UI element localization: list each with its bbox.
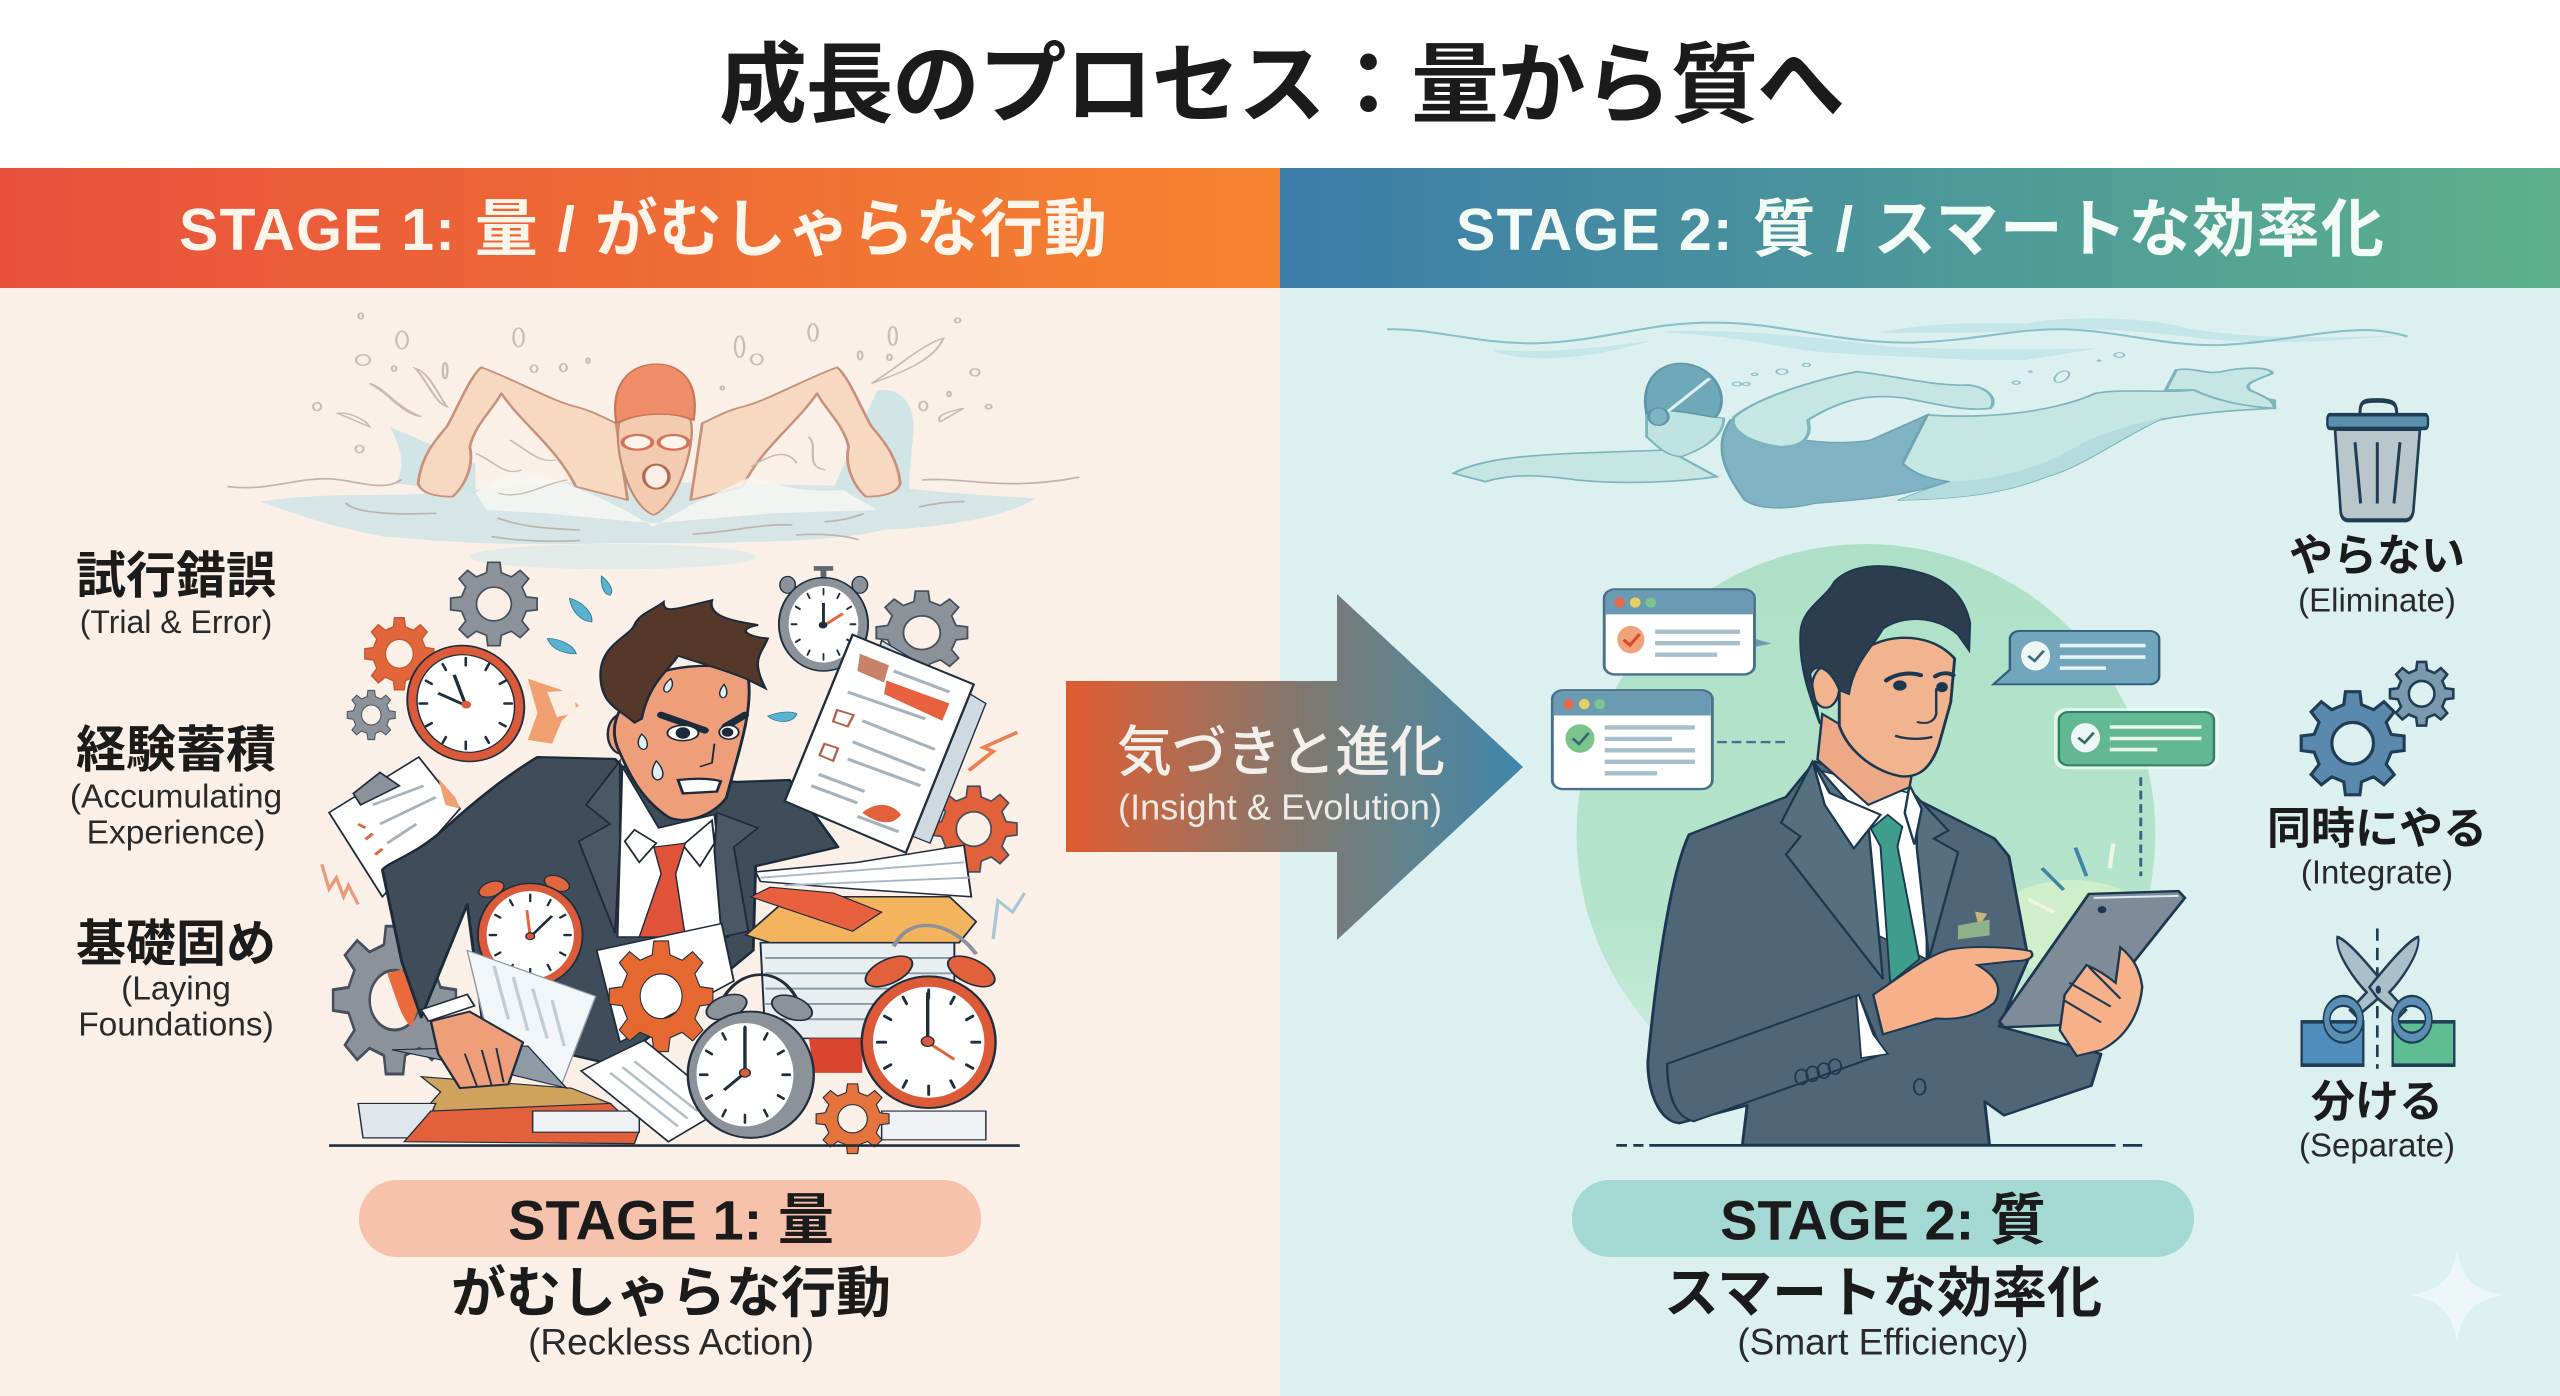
- caption: stage 1: (Reckless Action): [528, 1322, 814, 1362]
- illustration: overwhelmed businessman: [322, 562, 1025, 1154]
- background gears: [333, 562, 1017, 1074]
- window: orange check: [1604, 589, 1771, 674]
- red alarm clock: [859, 925, 1001, 1108]
- jacket: [1648, 761, 2101, 1145]
- caption: stage 1: [359, 1180, 981, 1362]
- caption: stage 2: STAGE 2: 質: [1720, 1188, 2046, 1252]
- hands: [1856, 947, 2142, 1058]
- arrow: insight and evolution: 気づきと進化: [1117, 721, 1445, 783]
- label: eliminate: やらない: [2289, 532, 2465, 580]
- icon: sparkle watermark: [2411, 1250, 2503, 1342]
- label: integrate: 同時にやる: [2267, 804, 2487, 854]
- arrow: insight and evolution: [1066, 594, 1523, 940]
- small orange gear: [816, 1084, 889, 1154]
- title: 成長のプロセス：量から質へ: [719, 36, 1845, 134]
- page background: [0, 0, 2560, 168]
- caption: stage 2: スマートな効率化: [1664, 1262, 2102, 1324]
- label: accumulating experience: Experience): [87, 814, 265, 852]
- paper stack: [746, 845, 976, 1073]
- arrow: insight and evolution: (Insight & Evolution): [1118, 786, 1442, 828]
- header: stage 2: STAGE 2: 質 / スマートな効率化: [1456, 195, 2384, 265]
- suit jacket: [382, 757, 838, 1065]
- label: laying foundations: [76, 916, 276, 1044]
- label: integrate: [2267, 804, 2487, 890]
- window: green check: [1552, 690, 1790, 789]
- sparkle rays: [2042, 848, 2086, 890]
- orange splash: [528, 679, 579, 744]
- caption: stage 1: STAGE 1: 量: [508, 1188, 834, 1252]
- bubble: green: [2054, 708, 2219, 876]
- caption: stage 2: (Smart Efficiency): [1737, 1322, 2029, 1362]
- icon: scissors: [2302, 928, 2454, 1069]
- clipboard: [329, 757, 460, 897]
- caption: stage 1: がむしゃらな行動: [451, 1262, 891, 1324]
- green circle: [1577, 544, 2155, 1124]
- icon: gears: [2301, 662, 2453, 795]
- label: integrate: (Integrate): [2301, 854, 2453, 890]
- label: eliminate: [2289, 532, 2465, 618]
- illustration: focused businessman: [1552, 544, 2219, 1145]
- label: laying foundations: Foundations): [78, 1006, 274, 1044]
- icon: trash can: [2327, 400, 2428, 520]
- label: eliminate: (Eliminate): [2298, 582, 2456, 618]
- header: stage 1: STAGE 1: 量 / がむしゃらな行動: [179, 195, 1107, 265]
- label: laying foundations: (Laying: [121, 970, 231, 1008]
- head: [601, 600, 768, 820]
- panel: stage 1 background: [0, 288, 1280, 1396]
- panel: stage 2 background: [1280, 288, 2560, 1396]
- glow: [1990, 880, 2154, 975]
- stopwatch top right: [779, 568, 868, 671]
- zig zags: [322, 864, 358, 904]
- illustration: calm swimmer: [1387, 318, 2408, 508]
- sweat drops: [547, 576, 797, 722]
- label: accumulating experience: [70, 722, 282, 852]
- label: separate: 分ける: [2311, 1078, 2443, 1126]
- label: laying foundations: 基礎固め: [76, 916, 276, 972]
- flying document: [785, 635, 986, 853]
- label: trial and error: 試行錯誤: [76, 548, 276, 604]
- label: separate: [2299, 1078, 2455, 1164]
- header: stage 2: [1280, 168, 2560, 288]
- clock middle: [475, 872, 583, 987]
- gray alarm clock: [688, 975, 818, 1138]
- floor line: [1616, 1142, 2142, 1149]
- caption: stage 2: [1572, 1180, 2194, 1362]
- loose sheets and folder in hand: [392, 924, 734, 1138]
- desk line: [329, 1142, 1020, 1149]
- desk books: [358, 1040, 986, 1144]
- label: trial and error: (Trial & Error): [80, 604, 272, 640]
- header: stage 1: [0, 168, 1280, 288]
- bubble: blue: [1993, 631, 2159, 684]
- tablet: [1999, 891, 2185, 1027]
- label: accumulating experience: (Accumulating: [70, 778, 282, 816]
- illustration: frantic swimmer: [229, 313, 1078, 569]
- clock top left: [398, 640, 534, 768]
- label: accumulating experience: 経験蓄積: [76, 722, 276, 778]
- label: separate: (Separate): [2299, 1126, 2455, 1164]
- label: trial and error: [76, 548, 276, 640]
- head: [1800, 566, 1970, 805]
